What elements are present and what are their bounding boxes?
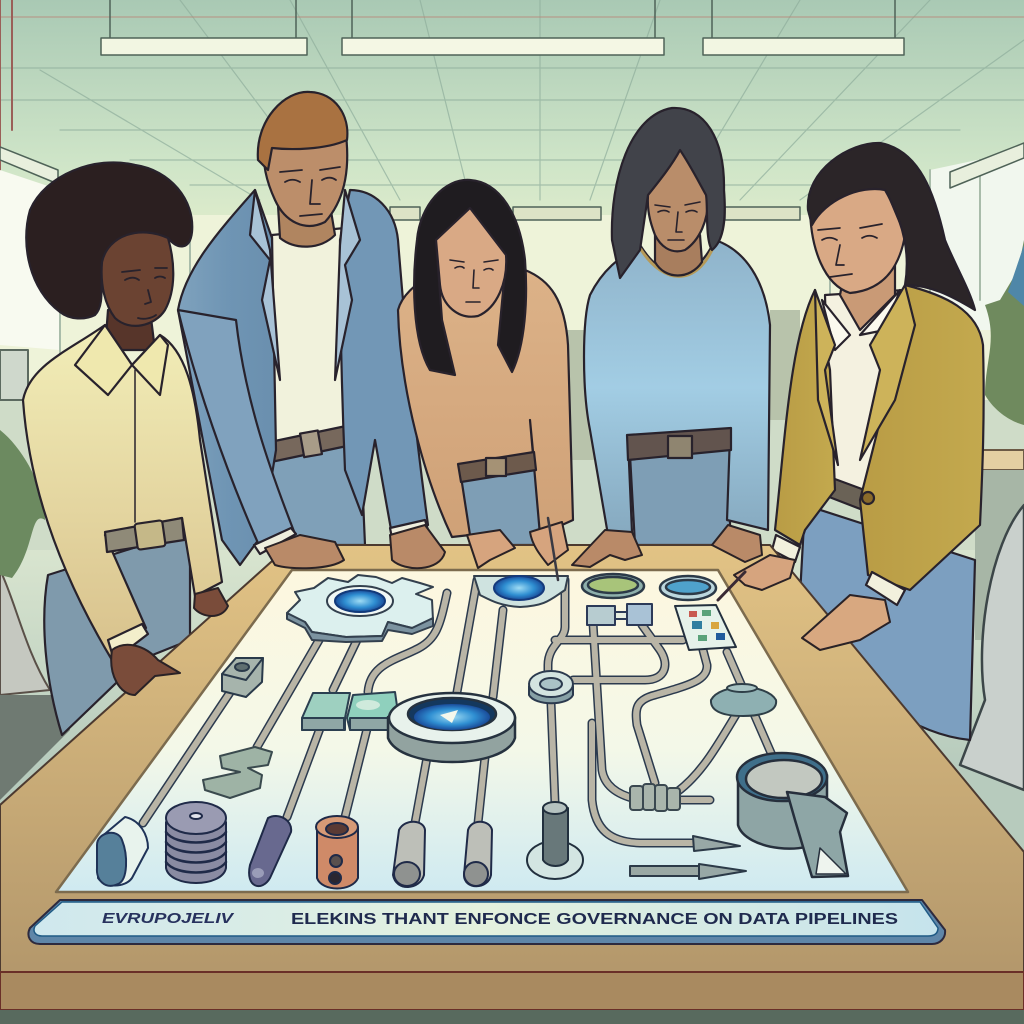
white shirt: [825, 290, 905, 500]
icon: top lens connector: [474, 576, 568, 607]
afro hair: [26, 162, 192, 318]
person 1: woman with afro in yellow shirt: [23, 162, 222, 735]
belt: [458, 452, 536, 482]
hand: person 4: [572, 530, 642, 567]
icon: large ring lens: [388, 693, 515, 762]
caption left label: EVRUPOJELIV: [102, 910, 235, 927]
icon: white capsule: [97, 817, 148, 886]
icon: colour tablet: [675, 605, 736, 650]
neck: [840, 265, 895, 330]
icon: pipe clamp: [630, 784, 680, 811]
face: [102, 232, 173, 326]
belt: [824, 475, 870, 512]
face: [810, 175, 905, 293]
face: [436, 208, 506, 317]
belt: [105, 518, 184, 552]
hand: person 1: [111, 645, 180, 695]
table front edge: [0, 972, 1024, 1010]
hand: person 2: [265, 535, 344, 568]
icon: small disk junction: [529, 671, 573, 703]
belt: [270, 426, 347, 462]
hands resting on table: [111, 518, 890, 695]
icon: top ovals: [582, 574, 716, 600]
caption strip: [28, 900, 945, 944]
icon: slate capsule handle: [249, 816, 291, 886]
yellow shirt: [23, 325, 222, 660]
icon: copper cylinder: [316, 816, 358, 888]
face: [264, 135, 347, 226]
gold blazer: [775, 290, 835, 545]
hand: person 5: [734, 555, 795, 590]
icon: arrow tips: [630, 836, 746, 879]
blue skirt: [800, 505, 975, 740]
neck: [278, 205, 335, 247]
icon: grey cylinders: [393, 822, 492, 887]
cuffs: [254, 528, 296, 554]
neck and face: [655, 235, 702, 276]
jeans: [44, 530, 190, 735]
icon: gear with blue lens: [287, 575, 433, 642]
person 2: man in blue blazer: [178, 92, 428, 565]
person 4: woman in light blue sweater: [584, 108, 770, 545]
icon: small square block: [222, 658, 263, 697]
white shirt: [272, 228, 345, 445]
icon: teal data blocks: [302, 692, 397, 730]
person 5: woman in gold blazer: [772, 143, 984, 740]
caption title: ELEKINS THANT ENFONCE GOVERNANCE ON DATA PIPELINES: [291, 911, 898, 928]
ceiling lights: [0, 0, 1024, 220]
pipeline rods: [143, 580, 775, 843]
table: [0, 545, 1024, 1024]
icon: paired small blocks: [587, 604, 652, 625]
blue sweater: [584, 240, 770, 535]
background furniture and plants: [0, 240, 1024, 800]
person 3: young woman in tan sweater: [398, 180, 573, 545]
jeans: [630, 445, 730, 545]
hand: person 3: [467, 530, 515, 568]
tan sweater: [398, 270, 573, 537]
hair: [612, 108, 725, 278]
cuffs: [772, 535, 800, 562]
icon: mushroom cap junction: [711, 684, 776, 716]
hair: [258, 92, 347, 170]
hair: [808, 143, 975, 310]
neck: [105, 310, 155, 350]
jeans: [460, 465, 540, 545]
icon: stacked disks: [166, 802, 226, 883]
board mat: [28, 570, 945, 944]
belt: [627, 428, 731, 460]
icon: post on round base: [527, 802, 583, 879]
hair: [414, 180, 526, 375]
jeans: [270, 430, 365, 545]
icon: tape roll: [737, 753, 848, 877]
blue blazer: [178, 190, 276, 565]
icon: bent S connector: [203, 747, 272, 798]
